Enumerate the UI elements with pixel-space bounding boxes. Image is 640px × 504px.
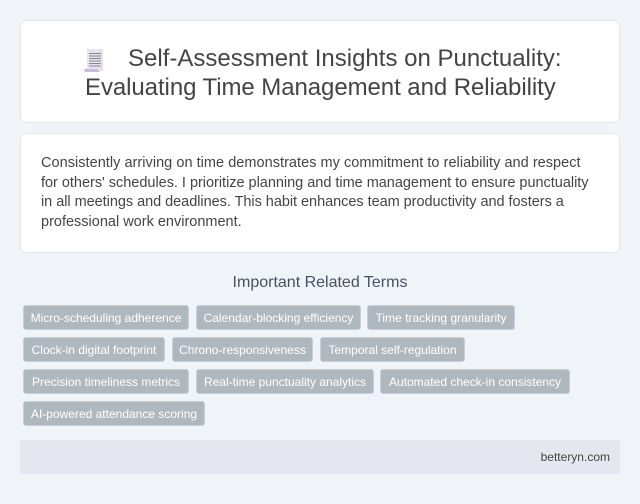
tag: Chrono-responsiveness xyxy=(179,343,306,357)
text: description paragraph: for others' schedules. I prioritize planning and time management to ensure punctuality xyxy=(41,175,589,191)
tag: Real-time punctuality analytics xyxy=(204,375,366,389)
tag xyxy=(196,369,374,394)
icon: document scroll xyxy=(84,49,104,72)
heading: important related terms: Important Related Terms xyxy=(233,274,407,291)
tag xyxy=(23,401,205,426)
tag: Automated check-in consistency xyxy=(389,375,561,389)
tag xyxy=(380,369,570,394)
tag xyxy=(320,337,465,362)
tag: Calendar-blocking efficiency xyxy=(204,311,353,325)
text: site name: betteryn.com xyxy=(541,450,610,464)
tag xyxy=(367,305,515,330)
text: description paragraph: in all meetings and deadlines. This habit enhances team productivity and fosters a xyxy=(41,194,564,210)
tag: Micro-scheduling adherence xyxy=(31,311,181,325)
tag: Clock-in digital footprint xyxy=(32,343,156,357)
tag xyxy=(23,305,189,330)
text: description paragraph: professional work environment. xyxy=(41,214,242,230)
tags: related terms xyxy=(23,305,570,426)
tag: Precision timeliness metrics xyxy=(32,375,180,389)
tag xyxy=(23,337,165,362)
tag xyxy=(172,337,313,362)
text: description paragraph: Consistently arriving on time demonstrates my commitment to reliability and respect xyxy=(41,155,581,171)
panel: description card xyxy=(20,133,620,253)
tag: AI-powered attendance scoring xyxy=(31,407,197,421)
tag: Time tracking granularity xyxy=(376,311,506,325)
text: description paragraph xyxy=(41,155,589,230)
tag: Temporal self-regulation xyxy=(328,343,457,357)
heading: title line 1: Self-Assessment Insights on Punctuality: xyxy=(128,45,562,72)
heading: title line 2: Evaluating Time Management and Reliability xyxy=(85,74,556,101)
tag xyxy=(23,369,189,394)
footer bar xyxy=(20,440,620,474)
panel: title card xyxy=(20,20,620,123)
tag xyxy=(196,305,361,330)
